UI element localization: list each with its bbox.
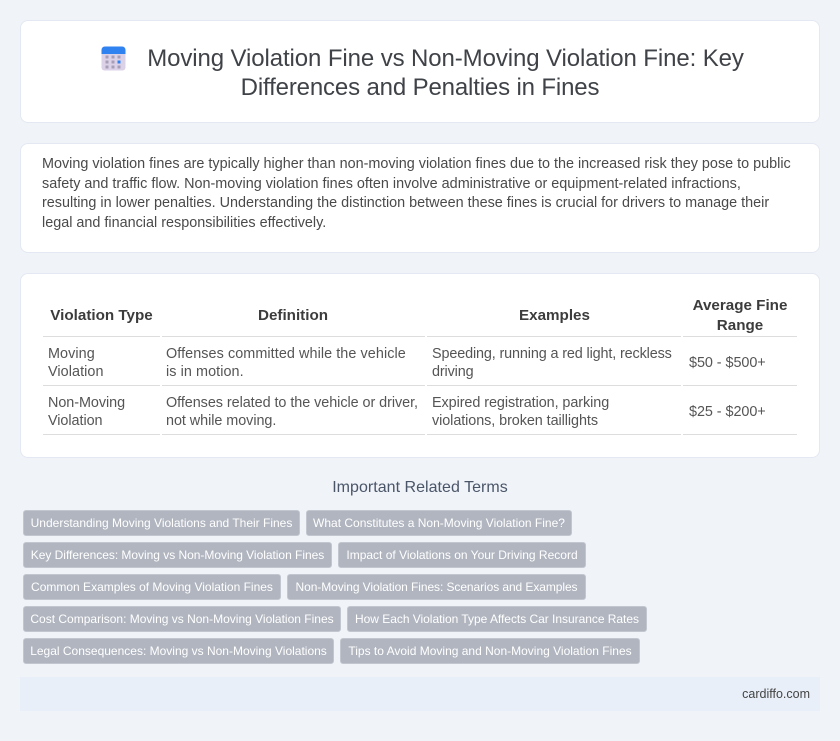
table headers	[50, 297, 787, 334]
table rows: Offenses committed while the vehicle	[166, 346, 406, 362]
table rows: Violation	[48, 364, 104, 380]
related terms tags: Non-Moving Violation Fines: Scenarios and Examples	[296, 580, 577, 594]
related terms tags: How Each Violation Type Affects Car Insurance Rates	[355, 612, 639, 626]
title: Moving Violation Fine vs Non-Moving Violation Fine: Key	[147, 45, 744, 72]
related terms tags: Tips to Avoid Moving and Non-Moving Violation Fines	[348, 644, 632, 658]
footer source: cardiffo.com	[742, 687, 810, 701]
table rows: Offenses related to the vehicle or driver,	[166, 395, 418, 411]
related terms tags: Impact of Violations on Your Driving Record	[346, 548, 578, 562]
table rows: Violation	[48, 413, 102, 429]
header panel	[20, 20, 820, 123]
panel: introduction	[20, 143, 820, 253]
table headers: Examples	[519, 307, 590, 324]
table rows: Speeding, running a red light, reckless	[432, 346, 672, 362]
intro text: resulting in lower penalties. Understanding the distinction between these fines is crucial for drivers to manage their	[42, 195, 769, 211]
table headers: Definition	[258, 307, 328, 324]
related terms heading: Important Related Terms	[332, 479, 508, 496]
table headers: Range	[717, 316, 763, 334]
table rows: Moving	[48, 346, 95, 362]
table headers: Average Fine	[693, 297, 787, 314]
related terms tags	[23, 510, 647, 664]
table rows: $25 - $200+	[689, 404, 766, 420]
icon: calendar	[102, 46, 126, 70]
table rows: Expired registration, parking	[432, 395, 609, 411]
title: Differences and Penalties in Fines	[241, 74, 599, 101]
table rows: driving	[432, 364, 473, 380]
related terms tags: Common Examples of Moving Violation Fines	[31, 580, 273, 594]
related terms tags: What Constitutes a Non-Moving Violation Fine?	[313, 516, 565, 530]
related terms tags: Understanding Moving Violations and Their Fines	[31, 516, 292, 530]
intro text: legal and financial responsibilities effectively.	[42, 214, 326, 230]
related terms tags: Key Differences: Moving vs Non-Moving Violation Fines	[31, 548, 324, 562]
table rows: $50 - $500+	[689, 355, 766, 371]
title	[147, 45, 744, 101]
table rows: is in motion.	[166, 364, 244, 380]
table rows: Non-Moving	[48, 395, 125, 411]
related terms tags: Cost Comparison: Moving vs Non-Moving Violation Fines	[30, 612, 334, 626]
panel: comparison table	[20, 273, 820, 458]
table headers: Violation Type	[50, 307, 153, 324]
related terms tags: Legal Consequences: Moving vs Non-Moving Violations	[30, 644, 327, 658]
table rows: not while moving.	[166, 413, 276, 429]
table rows: violations, broken taillights	[432, 413, 598, 429]
intro text: safety and traffic flow. Non-moving violation fines often involve administrative or equipment-related infractions,	[42, 176, 741, 192]
intro text	[42, 156, 791, 230]
intro text: Moving violation fines are typically higher than non-moving violation fines due to the increased risk they pose to public	[42, 156, 791, 172]
footer bar	[20, 677, 820, 711]
